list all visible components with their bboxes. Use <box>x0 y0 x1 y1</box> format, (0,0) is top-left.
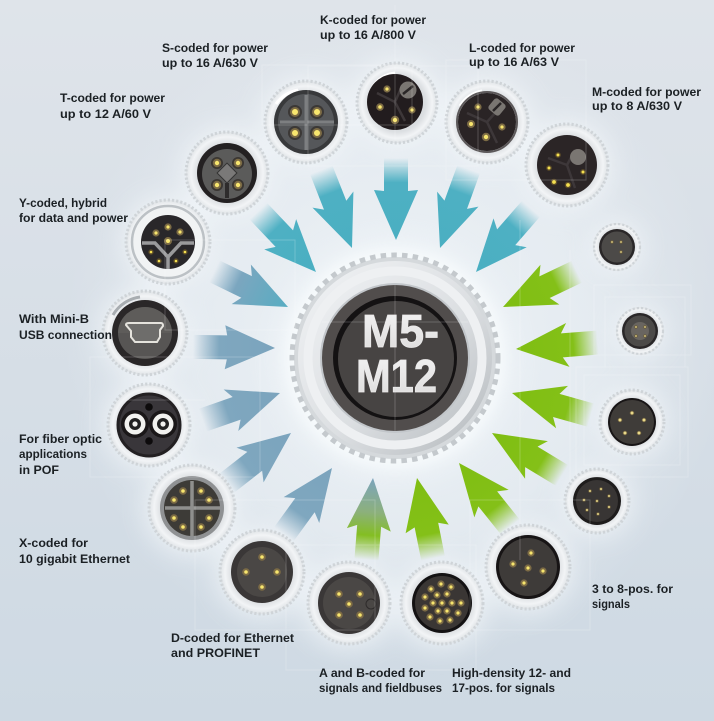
label: S-coded: up to 16 A/630 V <box>162 56 258 70</box>
arrows pointing to the centre <box>193 158 599 563</box>
central label: M5- <box>362 305 439 357</box>
arrow: T <box>242 196 332 287</box>
label: L-coded: up to 16 A/63 V <box>469 55 559 69</box>
label: fiber optic: For fiber optic <box>19 432 102 446</box>
arrow: 3-pos small <box>494 252 586 327</box>
label: L-coded <box>469 41 575 69</box>
label: X-coded <box>19 536 130 566</box>
label: high density <box>452 666 571 695</box>
label: M-coded: up to 8 A/630 V <box>592 99 682 113</box>
arrow: X-coded <box>213 416 305 501</box>
connector: M-coded <box>526 124 608 206</box>
connector: fiber optic <box>108 384 190 466</box>
glow behind connector wheel <box>99 57 668 649</box>
arrow: L <box>419 162 489 256</box>
arrow: 4-pos small <box>514 321 599 371</box>
label: Mini-B USB: With Mini-B <box>19 312 89 326</box>
arrow: Y-coded <box>205 251 298 327</box>
label: 3 to 8-pos <box>592 582 673 611</box>
connector: Y-coded hybrid <box>126 200 210 284</box>
label: Mini-B USB: USB connection <box>19 328 112 342</box>
arrow: S <box>301 162 372 256</box>
label: high density: 17-pos. for signals <box>452 681 555 695</box>
label: K-coded: K-coded for power <box>320 13 426 27</box>
label: T-coded <box>60 91 165 121</box>
arrow: 8-pos <box>481 414 574 494</box>
label: Y-coded: Y-coded, hybrid <box>19 196 107 210</box>
label: S-coded <box>162 41 268 70</box>
label: Y-coded: for data and power <box>19 211 128 225</box>
arrow: fiber optic <box>195 372 287 441</box>
label: A and B-coded: A and B-coded for <box>319 666 425 680</box>
arrow: M <box>459 194 548 286</box>
label: M-coded <box>592 85 701 113</box>
connector: 8-pos <box>565 469 629 533</box>
label: A and B-coded: signals and fieldbuses <box>319 681 442 695</box>
label: K-coded <box>320 13 426 42</box>
connector: A and B-coded <box>308 562 390 644</box>
label: Y-coded <box>19 196 128 225</box>
arrow: Mini-B <box>193 325 275 370</box>
arrow: high density <box>395 474 455 563</box>
label: D-coded <box>171 631 294 660</box>
label: fiber optic: in POF <box>19 463 59 477</box>
label: fiber optic: applications <box>19 447 87 461</box>
connector: 4-pos small <box>616 307 664 355</box>
connector: Mini-B USB <box>103 291 187 375</box>
label: M-coded: M-coded for power <box>592 85 701 99</box>
faint construction lines <box>90 5 691 670</box>
connector: K-coded <box>357 63 437 143</box>
label: X-coded: 10 gigabit Ethernet <box>19 552 130 566</box>
label: D-coded: D-coded for Ethernet <box>171 631 294 645</box>
connector: L-coded <box>446 81 528 163</box>
connector: 5-pos <box>600 390 664 454</box>
label: K-coded: up to 16 A/800 V <box>320 28 416 42</box>
connector: T-coded <box>186 132 268 214</box>
central label <box>356 305 439 402</box>
label: A and B-coded <box>319 666 442 695</box>
label: T-coded: up to 12 A/60 V <box>60 107 151 121</box>
label: L-coded: L-coded for power <box>469 41 575 55</box>
connector: D-coded <box>220 530 304 614</box>
connector: high-density <box>401 562 483 644</box>
label: fiber optic <box>19 432 102 477</box>
label: S-coded: S-coded for power <box>162 41 268 55</box>
connector: X-coded <box>149 465 235 551</box>
label: X-coded: X-coded for <box>19 536 88 550</box>
arrow: D-coded <box>266 455 350 547</box>
central M5-M12 connector <box>285 248 505 468</box>
label: T-coded: T-coded for power <box>60 91 165 105</box>
connector: 3 to 8-pos large <box>486 525 570 609</box>
arrow: 5-pos <box>506 372 597 436</box>
arrow: K <box>374 158 418 240</box>
arrow: A and B-coded <box>344 476 395 562</box>
label: D-coded: and PROFINET <box>171 646 261 660</box>
label: Mini-B USB <box>19 312 112 342</box>
connector: 3-pos small <box>593 223 641 271</box>
arrow: 3 to 8-pos <box>442 449 527 541</box>
connector: S-coded <box>265 81 347 163</box>
label: high density: High-density 12- and <box>452 666 571 680</box>
central label: M12 <box>356 350 437 402</box>
label: 3 to 8-pos: 3 to 8-pos. for <box>592 582 673 596</box>
label: 3 to 8-pos: signals <box>592 597 630 611</box>
